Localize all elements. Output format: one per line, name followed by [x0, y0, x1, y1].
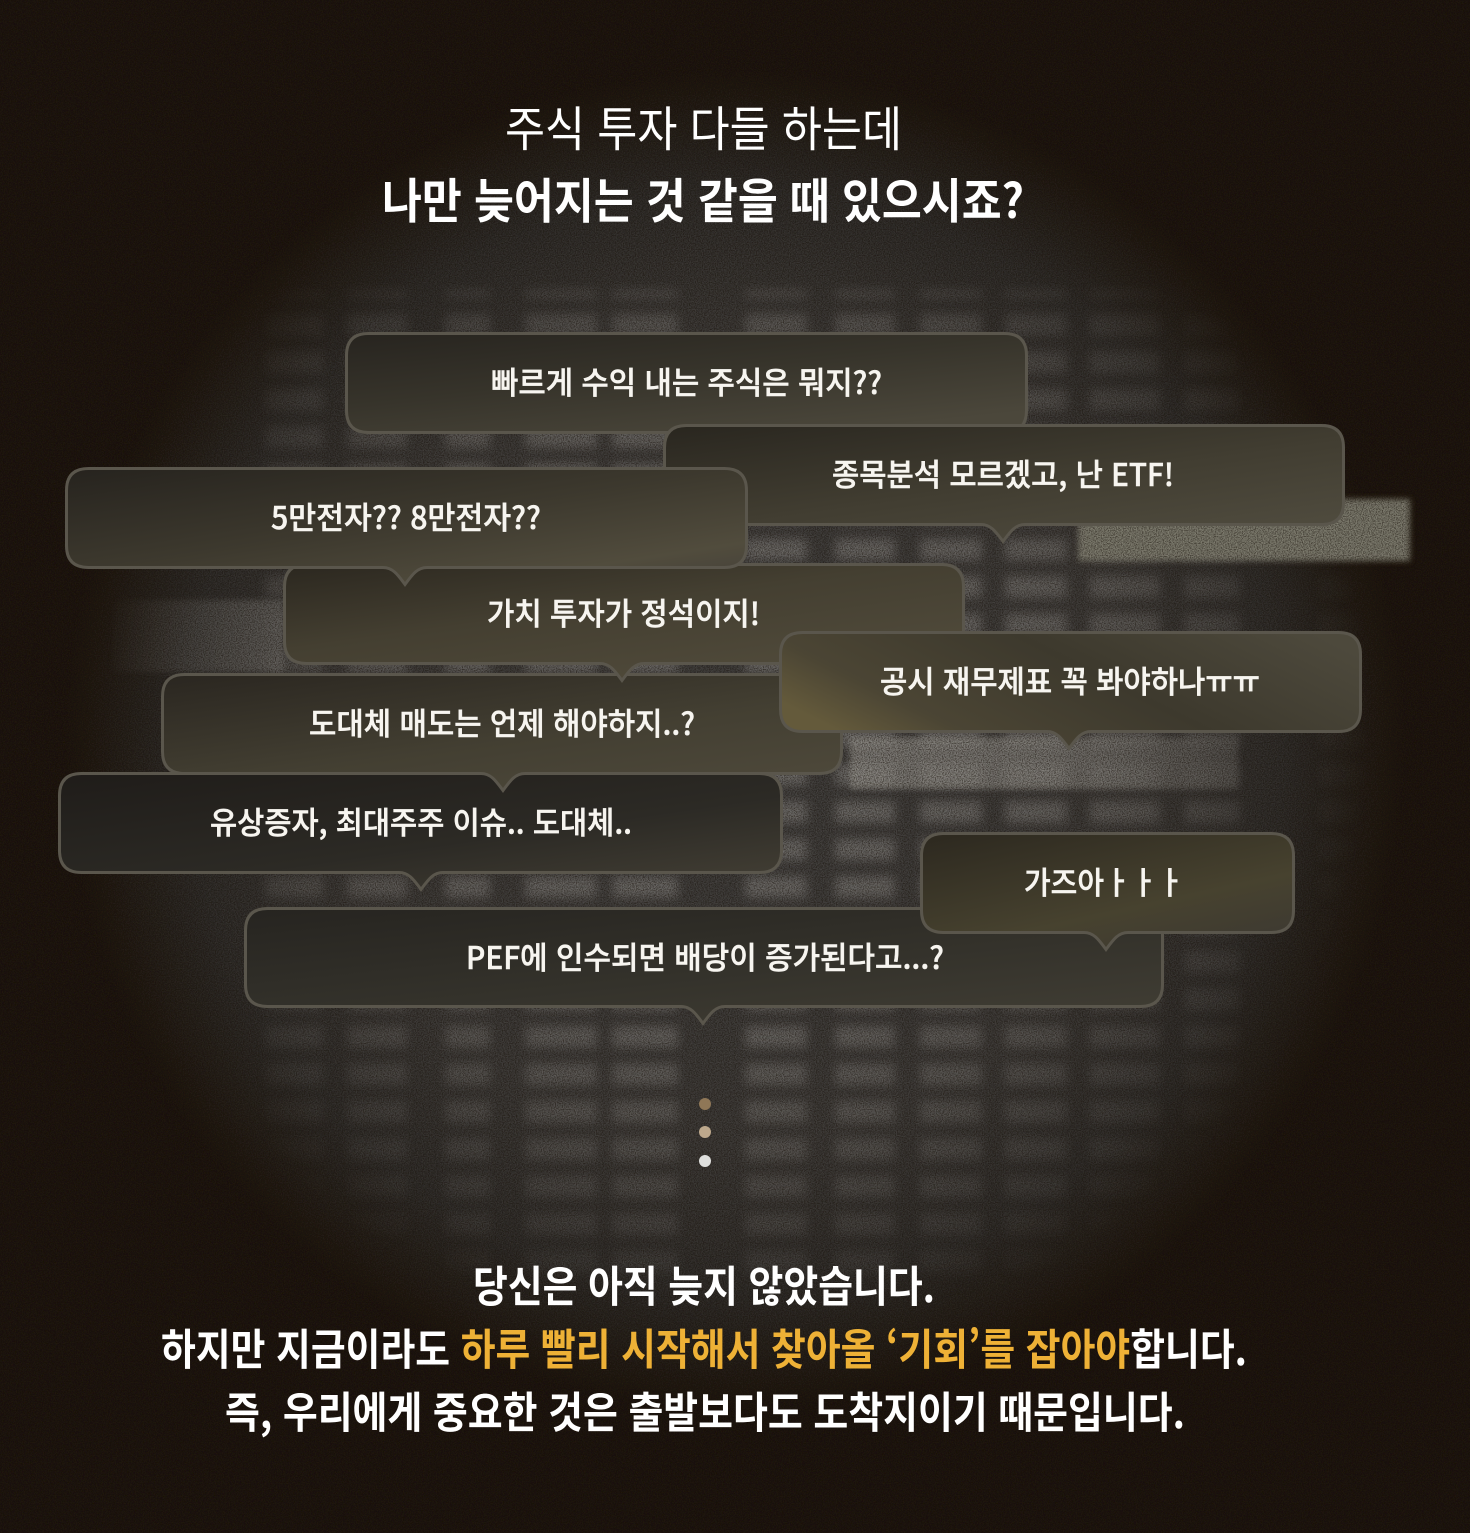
bubble: disclosures: 공시 재무제표 꼭 봐야하나ㅠㅠ: [880, 657, 1260, 702]
bubble: rights offering: [60, 774, 782, 890]
blurred stock table with grain: [78, 82, 1415, 1398]
bubble: rights offering: 유상증자, 최대주주 이슈.. 도대체..: [210, 798, 632, 843]
ellipsis dots: [699, 1098, 711, 1167]
closing message: 하지만 지금이라도 하루 빨리 시작해서 찾아올 ‘기회’를 잡아야합니다.: [161, 1316, 1247, 1378]
bubble: ETF: [664, 426, 1344, 542]
bubble: disclosures: [780, 632, 1360, 748]
bubble: value investing: [284, 564, 964, 680]
bubble: fast profit stocks: [346, 334, 1026, 432]
title: 나만 늦어지는 것 같을 때 있으시죠?: [382, 162, 1024, 232]
background: [78, 82, 1415, 1398]
title: [382, 90, 1024, 232]
bubble: PEF dividend: [246, 908, 1162, 1024]
bubble: fast profit stocks: 빠르게 수익 내는 주식은 뭐지??: [491, 358, 882, 403]
bubble: Samsung price: [66, 468, 746, 584]
bubble: when to sell: 도대체 매도는 언제 해야하지..?: [309, 699, 695, 744]
bubble: ETF: 종목분석 모르겠고, 난 ETF!: [832, 450, 1174, 495]
bubble: let's go: 가즈아ㅏㅏㅏ: [1024, 858, 1184, 903]
bubble: PEF dividend: PEF에 인수되면 배당이 증가된다고...?: [466, 933, 944, 978]
closing message: [161, 1253, 1247, 1441]
title: 주식 투자 다들 하는데: [505, 90, 902, 160]
bubble: let's go: [922, 834, 1294, 950]
bubble: Samsung price: 5만전자?? 8만전자??: [271, 493, 541, 538]
closing message: 즉, 우리에게 중요한 것은 출발보다도 도착지이기 때문입니다.: [225, 1379, 1185, 1441]
bubble: value investing: 가치 투자가 정석이지!: [487, 589, 760, 634]
closing message: 당신은 아직 늦지 않았습니다.: [473, 1253, 935, 1315]
bubble: when to sell: [162, 674, 842, 790]
